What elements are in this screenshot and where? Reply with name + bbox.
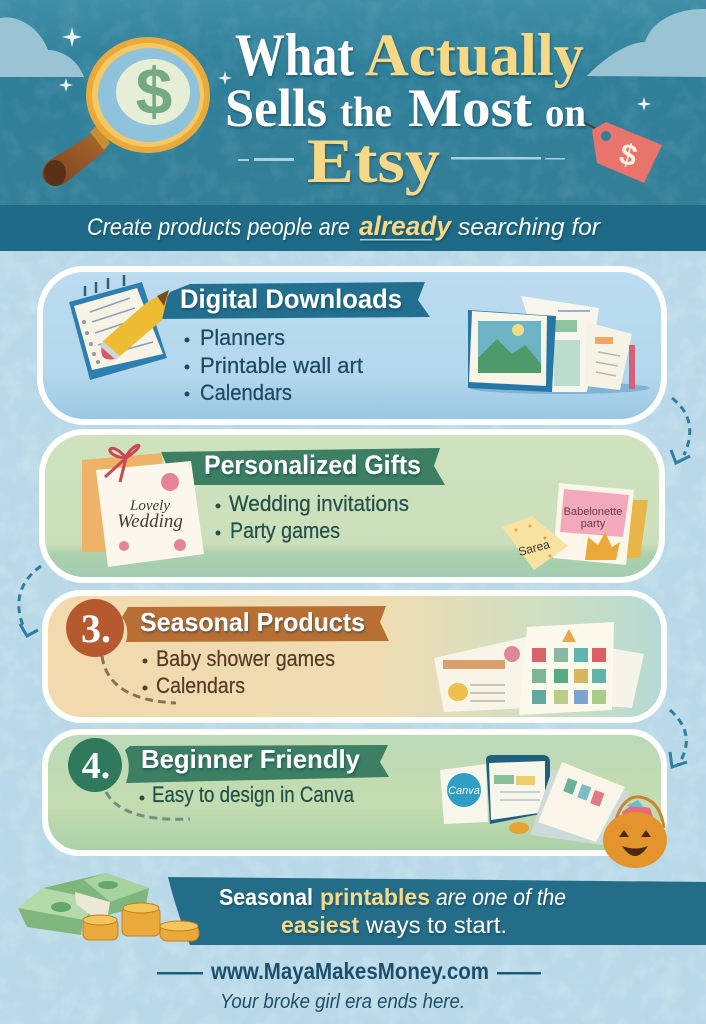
website url: www.MayaMakesMoney.com <box>210 958 489 984</box>
list: personalized gifts: Wedding invitations <box>229 491 409 516</box>
bottom callout band <box>168 877 706 945</box>
number badge 4 <box>68 738 122 792</box>
icon: pumpkin candy bucket <box>603 797 667 868</box>
icon: canva tablet and sheets: Canva <box>448 785 480 797</box>
title: Sells <box>225 78 327 138</box>
callout text: ways to start. <box>365 912 507 938</box>
number badge 3: 3. <box>81 606 111 651</box>
number badge 3 <box>66 599 124 657</box>
list: digital downloads: Printable wall art <box>200 353 363 378</box>
subtitle text <box>87 211 601 241</box>
icon: price tag <box>585 122 662 183</box>
sparkles <box>59 27 652 111</box>
callout text: easiest <box>281 912 359 938</box>
icon: magnifying glass with dollar <box>42 37 210 186</box>
title: the <box>340 90 392 136</box>
list: seasonal products <box>142 646 335 698</box>
icon: notepad and pencil <box>69 275 169 380</box>
cloud left <box>0 17 84 77</box>
subtitle band <box>0 205 706 251</box>
title: Most <box>408 78 532 138</box>
title: Actually <box>365 22 584 88</box>
callout text: are one of the <box>436 884 566 910</box>
icon: party cards: Babelonette <box>564 506 622 518</box>
tagline: Your broke girl era ends here. <box>220 991 465 1013</box>
icon: wedding invitation <box>82 445 204 567</box>
list: digital downloads <box>184 325 363 405</box>
callout text: printables <box>320 884 430 910</box>
panel: personalized gifts <box>42 432 662 580</box>
dashed connector <box>102 656 176 703</box>
title <box>225 22 586 196</box>
arrow: card 1 to card 2 <box>671 398 690 463</box>
list: personalized gifts <box>216 491 409 543</box>
icon: cash stack and coins <box>18 873 199 941</box>
icon: wedding invitation: Lovely <box>129 498 170 514</box>
panel: seasonal products <box>45 593 664 720</box>
header panel <box>0 0 706 206</box>
icon: canva tablet and sheets <box>440 755 630 846</box>
icon: party cards: party <box>581 518 606 530</box>
arrow: card 2 to card 3 <box>19 566 41 636</box>
ribbon heading: beginner friendly: Beginner Friendly <box>141 744 361 774</box>
subtitle text: Create products people are <box>87 214 350 241</box>
panel: digital downloads <box>40 269 664 422</box>
list: digital downloads: Calendars <box>200 380 292 405</box>
title: What <box>235 22 354 88</box>
list: beginner friendly: Easy to design in Canva <box>152 782 355 807</box>
ribbon heading: digital downloads: Digital Downloads <box>180 284 402 314</box>
icon: party cards <box>502 483 648 570</box>
icon: price tag: $ <box>616 137 641 174</box>
icon: printable documents stack <box>468 296 650 394</box>
list: personalized gifts: Party games <box>230 518 340 543</box>
title: Etsy <box>307 126 440 196</box>
cloud right <box>587 9 706 77</box>
ribbon heading: personalized gifts <box>161 448 445 485</box>
callout text <box>219 884 566 938</box>
ribbon heading: personalized gifts: Personalized Gifts <box>204 450 421 480</box>
title flourish lines <box>238 157 565 161</box>
list: digital downloads: Planners <box>200 325 285 350</box>
icon: party cards: Sarea <box>517 537 552 559</box>
icon: bingo and game sheets <box>434 622 644 715</box>
list: seasonal products: Baby shower games <box>156 646 335 671</box>
ribbon heading: beginner friendly <box>125 744 389 783</box>
subtitle text: already <box>359 211 453 241</box>
number badge 4: 4. <box>82 745 110 787</box>
icon: wedding invitation: Wedding <box>117 511 183 532</box>
dashed connector <box>106 792 190 819</box>
arrow: card 3 to card 4 <box>670 710 687 767</box>
subtitle text: searching for <box>458 214 601 241</box>
list: seasonal products: Calendars <box>156 673 245 698</box>
panel: beginner friendly <box>45 732 664 853</box>
ribbon heading: digital downloads <box>154 282 430 319</box>
ribbon heading: seasonal products: Seasonal Products <box>140 607 365 637</box>
title: on <box>545 90 586 135</box>
callout text: Seasonal <box>219 884 313 910</box>
icon: magnifying glass with dollar: $ <box>136 54 172 128</box>
